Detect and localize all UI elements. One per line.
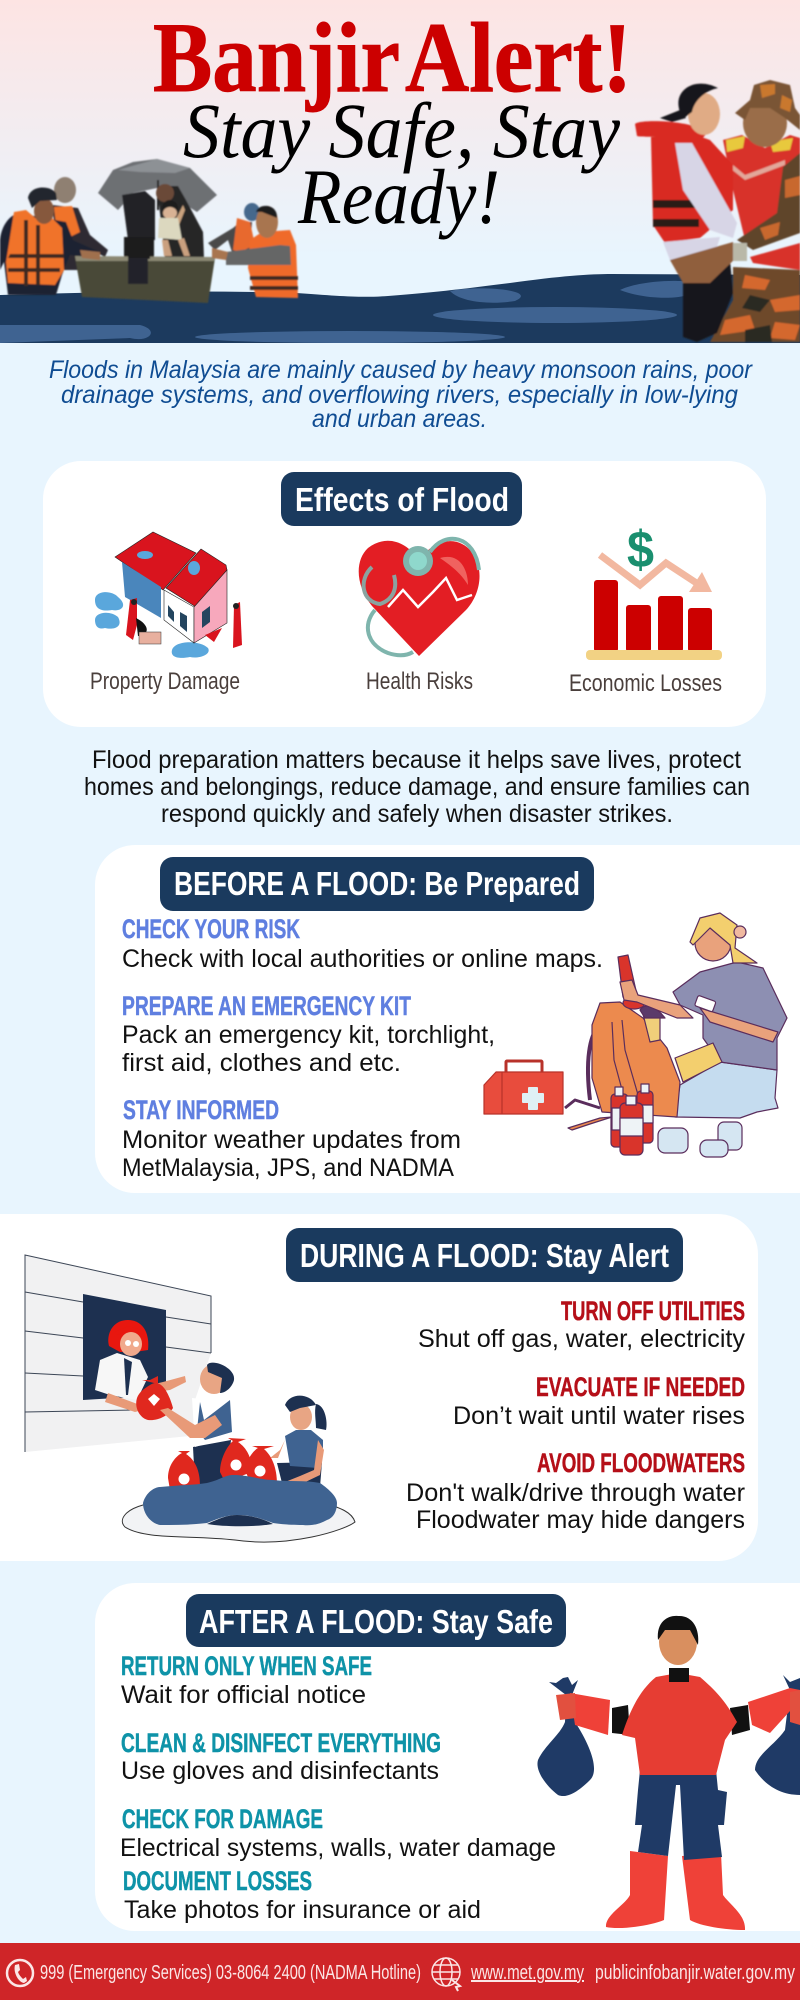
icon: heart with stethoscope (359, 539, 480, 656)
window (83, 1294, 166, 1400)
text: why preparation matters (84, 746, 750, 828)
tip: check your risk (122, 914, 603, 973)
rescuer right (208, 203, 298, 298)
rescuer behind (52, 177, 108, 270)
shirt (673, 962, 787, 1070)
man's face and hat (743, 99, 787, 147)
tip: stay informed: Monitor weather updates from (122, 1126, 461, 1154)
child trousers (683, 260, 733, 342)
motor and passengers (122, 184, 204, 258)
label: property damage: Property Damage (90, 668, 240, 695)
text: hotlines: 999 (Emergency Services) 03-8064 2400 (NADMA Hotline) (40, 1962, 421, 1984)
tip: avoid floodwaters: Floodwater may hide dangers (416, 1506, 745, 1534)
left hand (556, 1693, 576, 1720)
man's vest (723, 135, 800, 240)
head and hair (690, 913, 757, 963)
title: Banjir Alert: Banjir (153, 2, 400, 113)
right bag (755, 1675, 800, 1795)
label: economic losses: Economic Losses (569, 670, 722, 697)
heading pill: effects (281, 472, 522, 526)
subtitle line 1: Stay Safe, Stay (183, 87, 620, 174)
tip: return only when safe: Wait for official notice (121, 1681, 366, 1709)
illustration: aid being handed through window (25, 1255, 355, 1542)
tip: check for damage: CHECK FOR DAMAGE (122, 1804, 323, 1834)
intro text: drainage systems, and overflowing rivers, especially in low-lying (61, 381, 738, 409)
tip: document losses (123, 1866, 481, 1924)
tip: turn off utilities (418, 1296, 745, 1353)
intro text (49, 356, 754, 433)
man's collar patches (726, 136, 793, 152)
bottles (611, 1084, 653, 1155)
illustration: woman packing emergency kit (484, 913, 787, 1157)
icon: damaged house (95, 532, 242, 658)
tip: prepare an emergency kit: Pack an emergency kit, torchlight, (122, 1021, 495, 1049)
right hand (790, 1690, 800, 1725)
tip: prepare an emergency kit: PREPARE AN EMERGENCY KIT (122, 991, 411, 1021)
heading pill: after: AFTER A FLOOD: Stay Safe (199, 1603, 553, 1640)
intro text: Floods in Malaysia are mainly caused by heavy monsoon rains, poor (49, 356, 754, 384)
child's life jacket (651, 133, 733, 243)
tip: turn off utilities: Shut off gas, water, electricity (418, 1325, 745, 1353)
tip: avoid floodwaters (406, 1448, 745, 1534)
aid bag held (136, 1376, 173, 1420)
right sleeve (748, 1688, 800, 1733)
header sky gradient (0, 0, 800, 343)
tip: check your risk: Check with local authorities or online maps. (122, 945, 603, 973)
tip: evacuate if needed: Don’t wait until water rises (453, 1402, 745, 1430)
wall (25, 1255, 211, 1452)
child's shirt (675, 143, 737, 238)
trousers and pockets (635, 1770, 727, 1860)
head (659, 1619, 697, 1665)
blue sandbag mound (143, 1475, 337, 1525)
panel: during a flood (0, 1214, 758, 1561)
tip: evacuate if needed (453, 1372, 745, 1430)
folded clothes (675, 1043, 722, 1082)
tip: avoid floodwaters: Don't walk/drive through water (406, 1479, 745, 1507)
aid worker in window (95, 1320, 186, 1412)
panel: before a flood (95, 845, 800, 1193)
subtitle line 2: Ready! (297, 153, 500, 240)
icon: economic chart (586, 521, 722, 660)
neck (669, 1668, 689, 1682)
lower arm and phone (694, 995, 778, 1042)
mound shadow (207, 1515, 273, 1526)
link: met website: www.met.gov.my (470, 1962, 584, 1984)
left sleeve cuffs (612, 1705, 630, 1735)
title: Banjir Alert: Alert! (405, 2, 632, 113)
heading pill: during: DURING A FLOOD: Stay Alert (300, 1237, 669, 1274)
text: why preparation matters: Flood preparation matters because it helps save lives, protect (92, 746, 741, 774)
tip: stay informed: STAY INFORMED (123, 1095, 279, 1125)
volunteer sitting (270, 1396, 327, 1487)
icon: phone (7, 1960, 33, 1986)
header banner (0, 0, 800, 343)
footer bar (0, 1943, 800, 2000)
heading pill: effects: Effects of Flood (295, 481, 509, 518)
torch (618, 955, 645, 1009)
tip: document losses: Take photos for insurance or aid (124, 1896, 481, 1924)
rescue boat photo group (0, 159, 298, 303)
heading pill: before: BEFORE A FLOOD: Be Prepared (174, 865, 580, 902)
heading pill: after (186, 1594, 566, 1647)
heading pill: before (160, 857, 594, 911)
tip: return only when safe: RETURN ONLY WHEN SAFE (121, 1651, 372, 1681)
first aid box (484, 1061, 563, 1114)
flood water wave (0, 274, 800, 343)
tip: document losses: DOCUMENT LOSSES (123, 1866, 312, 1896)
umbrella (98, 159, 217, 212)
illustration: man holding rubbish bags (537, 1616, 800, 1930)
tip: prepare an emergency kit (122, 991, 495, 1077)
panel: effects of flood (43, 461, 766, 727)
boots (606, 1851, 668, 1928)
aid bags on floor (168, 1438, 277, 1490)
rescuer carrying child photo (635, 80, 800, 342)
text: why preparation matters: homes and belongings, reduce damage, and ensure families can (84, 773, 750, 801)
backpack (565, 1002, 680, 1130)
man's hand (670, 242, 737, 283)
hair (658, 1616, 698, 1645)
arm holding torch (620, 980, 693, 1018)
camo trousers (710, 267, 800, 342)
tip: check for damage (120, 1804, 556, 1862)
text: why preparation matters: respond quickly and safely when disaster strikes. (161, 800, 673, 828)
volunteer standing (160, 1363, 234, 1485)
title: Banjir Alert (153, 2, 632, 113)
boat (75, 245, 215, 303)
left sleeve (570, 1693, 610, 1735)
tip: stay informed: MetMalaysia, JPS, and NADMA (122, 1154, 454, 1182)
right sleeve cuff (730, 1705, 750, 1735)
tip: clean and disinfect: CLEAN & DISINFECT EVERYTHING (121, 1728, 441, 1758)
tip: check your risk: CHECK YOUR RISK (122, 914, 300, 944)
icon: globe (432, 1958, 460, 1991)
tins and bandages (658, 1122, 742, 1157)
dollar sign: $ (627, 521, 654, 579)
tip: stay informed (122, 1095, 461, 1182)
panel: after a flood (95, 1583, 800, 1931)
man's camo arm (737, 153, 800, 250)
skirt (675, 1062, 778, 1118)
heading pill: during (286, 1228, 683, 1282)
floor shadow (122, 1503, 355, 1542)
tip: check for damage: Electrical systems, walls, water damage (120, 1834, 556, 1862)
left bag (537, 1677, 594, 1796)
tip: clean and disinfect: Use gloves and disinfectants (121, 1757, 439, 1785)
tip: return only when safe (121, 1651, 372, 1709)
shirt (622, 1673, 737, 1775)
intro text: and urban areas. (312, 405, 487, 433)
rescuer left (0, 188, 100, 295)
child's head (688, 93, 720, 135)
label: health risks: Health Risks (366, 668, 473, 695)
tip: prepare an emergency kit: first aid, clothes and etc. (122, 1049, 401, 1077)
tip: clean and disinfect (121, 1728, 441, 1785)
